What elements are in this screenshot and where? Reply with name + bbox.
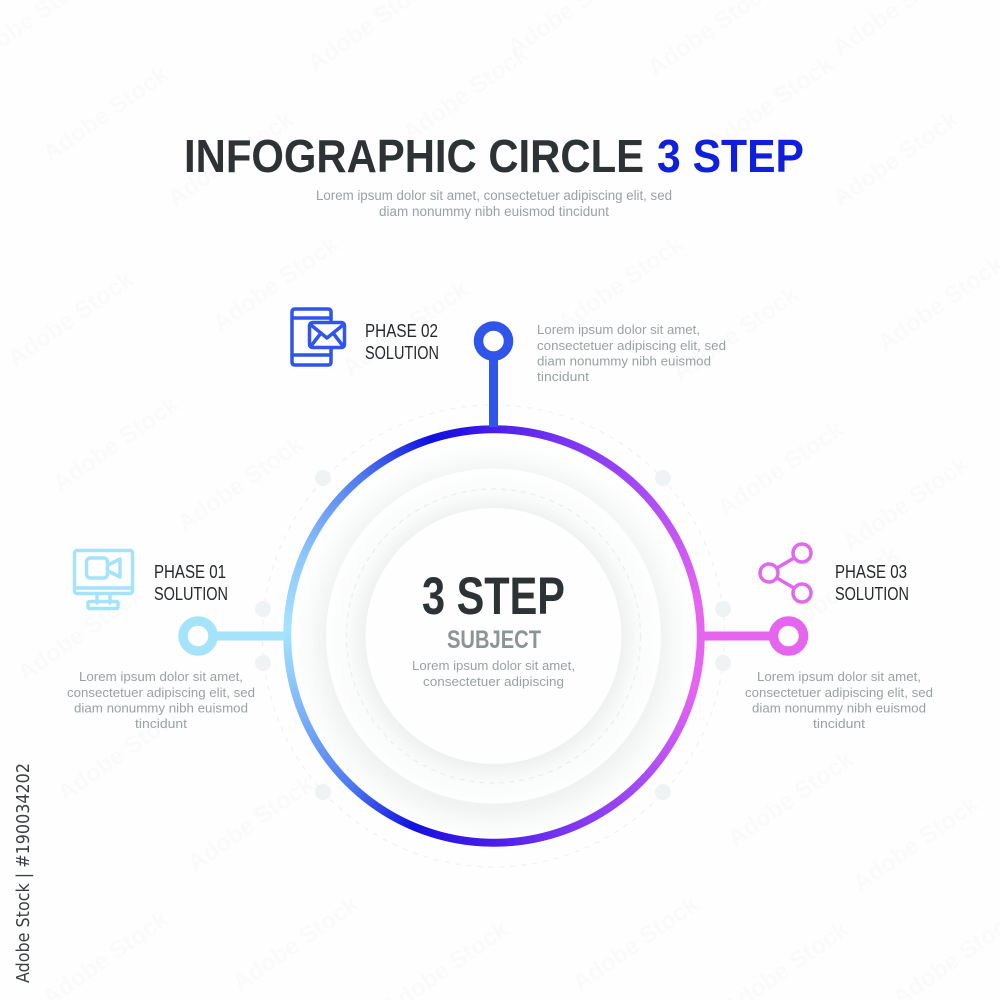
- subtitle: [316, 188, 672, 219]
- text block: phase 03: [745, 669, 933, 731]
- label: phase 03: SOLUTION: [835, 584, 909, 604]
- watermark: Adobe Stock: [48, 390, 184, 497]
- gradient ring: [282, 425, 704, 847]
- connector: phase 01: [183, 621, 286, 651]
- watermark: Adobe Stock: [848, 790, 984, 897]
- text block: phase 02: Lorem ipsum dolor sit amet,: [537, 322, 700, 337]
- text block: phase 01: consectetuer adipiscing elit, sed: [67, 685, 255, 700]
- watermark: Adobe Stock: [228, 890, 364, 997]
- watermark: Adobe Stock: [768, 540, 904, 647]
- center text: Lorem ipsum dolor sit amet,: [412, 658, 575, 673]
- watermark: Adobe Stock: [398, 40, 534, 147]
- icon: monitor with video camera: [74, 550, 132, 608]
- text block: phase 01: [67, 669, 255, 731]
- icon: phone with envelope: [292, 309, 344, 365]
- connector: phase 03: [702, 621, 804, 651]
- watermark: Adobe Stock: [208, 230, 344, 337]
- text block: phase 02: tincidunt: [537, 369, 589, 384]
- center text: consectetuer adipiscing: [423, 674, 564, 689]
- text block: phase 02: diam nonummy nibh euismod: [537, 354, 711, 368]
- subtitle: diam nonummy nibh euismod tincidunt: [379, 204, 609, 219]
- text block: phase 01: Lorem ipsum dolor sit amet,: [79, 669, 243, 684]
- watermark: Adobe Stock: [53, 700, 189, 807]
- watermark: Adobe Stock: [3, 265, 139, 372]
- text block: phase 03: Lorem ipsum dolor sit amet,: [757, 669, 921, 684]
- label: phase 02: [365, 321, 439, 363]
- watermark: Adobe Stock: [183, 770, 319, 877]
- stock credit: Adobe Stock | #190034202: [13, 763, 34, 983]
- text block: phase 01: tincidunt: [135, 716, 187, 731]
- label: phase 03: [835, 562, 909, 604]
- icon: share nodes: [760, 544, 811, 602]
- watermark: Adobe Stock: [163, 105, 299, 212]
- text block: phase 02: [537, 322, 726, 384]
- watermark: Adobe Stock: [553, 230, 689, 337]
- label: phase 02: PHASE 02: [365, 321, 438, 341]
- text block: phase 03: diam nonummy nibh euismod: [752, 700, 926, 716]
- label: phase 01: PHASE 01: [154, 562, 226, 582]
- watermark: Adobe Stock: [173, 430, 309, 537]
- title: 3 STEP: [657, 130, 804, 182]
- center text: [412, 658, 575, 689]
- watermark: Adobe Stock: [338, 275, 474, 382]
- watermark: Adobe Stock: [723, 745, 859, 852]
- label: phase 01: SOLUTION: [154, 584, 228, 604]
- decorative dots on dashed orbit: [255, 470, 731, 800]
- watermark: Adobe Stock: [703, 50, 839, 157]
- center heading: 3 STEP: [422, 567, 565, 626]
- connector: phase 02: [478, 326, 508, 427]
- title: INFOGRAPHIC CIRCLE: [184, 130, 644, 182]
- label: phase 01: [154, 562, 228, 604]
- label: phase 02: SOLUTION: [365, 343, 439, 363]
- watermark: Adobe Stock: [713, 415, 849, 522]
- label: phase 03: PHASE 03: [835, 562, 907, 582]
- subtitle: Lorem ipsum dolor sit amet, consectetuer adipiscing elit, sed: [316, 188, 672, 203]
- watermark: Adobe Stock: [668, 280, 804, 387]
- center subheading: SUBJECT: [447, 626, 541, 654]
- concentric discs: [262, 405, 724, 867]
- text block: phase 01: diam nonummy nibh euismod: [74, 700, 248, 716]
- watermark: Adobe Stock: [838, 450, 974, 557]
- watermark: Adobe Stock: [13, 580, 149, 687]
- text block: phase 03: consectetuer adipiscing elit, sed: [745, 685, 933, 700]
- text block: phase 02: consectetuer adipiscing elit, sed: [537, 338, 726, 353]
- text block: phase 03: tincidunt: [813, 716, 865, 731]
- watermark: Adobe Stock: [568, 890, 704, 997]
- watermark: Adobe Stock: [38, 60, 174, 167]
- watermark: Adobe Stock: [828, 105, 964, 212]
